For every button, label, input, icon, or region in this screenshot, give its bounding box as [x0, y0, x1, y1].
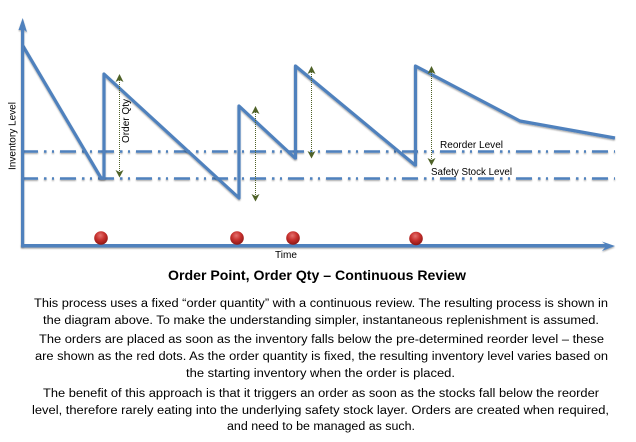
y axis label: Inventory Level [8, 102, 18, 170]
reorder level line [22, 150, 615, 153]
paragraph 2 [35, 334, 608, 380]
paragraph 3: level, therefore rarely eating into the underlying safety stock layer. Orders are created when required, [32, 405, 609, 417]
paragraph 1: This process uses a fixed “order quantity” with a continuous review. The resulting process is shown in [34, 298, 608, 310]
chart: inventory level over time [8, 18, 615, 261]
paragraph 2: are shown as the red dots. As the order quantity is fixed, the resulting inventory level varies based on [35, 351, 608, 363]
order quantity arrow 2 [252, 106, 260, 202]
order quantity arrow 1 [116, 74, 124, 178]
order dot 4 [409, 232, 423, 245]
order dot 1 [94, 231, 108, 245]
paragraph 1: the diagram above. To make the understanding simpler, instantaneous replenishment is assumed. [43, 315, 599, 327]
reorder level label: Reorder Level [440, 140, 503, 151]
order quantity arrow 3 [308, 66, 316, 158]
time label: Time [275, 250, 297, 261]
order dot 3 [286, 231, 300, 245]
paragraph 3 [32, 388, 609, 433]
order qty label: Order Qty [121, 99, 132, 143]
paragraph 1 [34, 298, 608, 327]
order quantity arrow 4 [428, 66, 436, 166]
horizontal axis with arrow [21, 242, 615, 251]
safety stock level line [22, 177, 615, 180]
paragraph 2: the starting inventory when the order is placed. [186, 368, 455, 380]
order dot 2 [230, 231, 244, 245]
paragraph 3: and need to be managed as such. [227, 421, 415, 433]
inventory sawtooth line [23, 46, 615, 198]
paragraph 2: The orders are placed as soon as the inventory falls below the pre-determined reorder level – these [39, 334, 604, 346]
paragraph 3: The benefit of this approach is that it triggers an order as soon as the stocks fall below the reorder [43, 388, 599, 400]
vertical axis with arrow [18, 18, 27, 246]
title: Order Point, Order Qty – Continuous Review [168, 268, 467, 283]
safety stock level label: Safety Stock Level [431, 167, 512, 178]
